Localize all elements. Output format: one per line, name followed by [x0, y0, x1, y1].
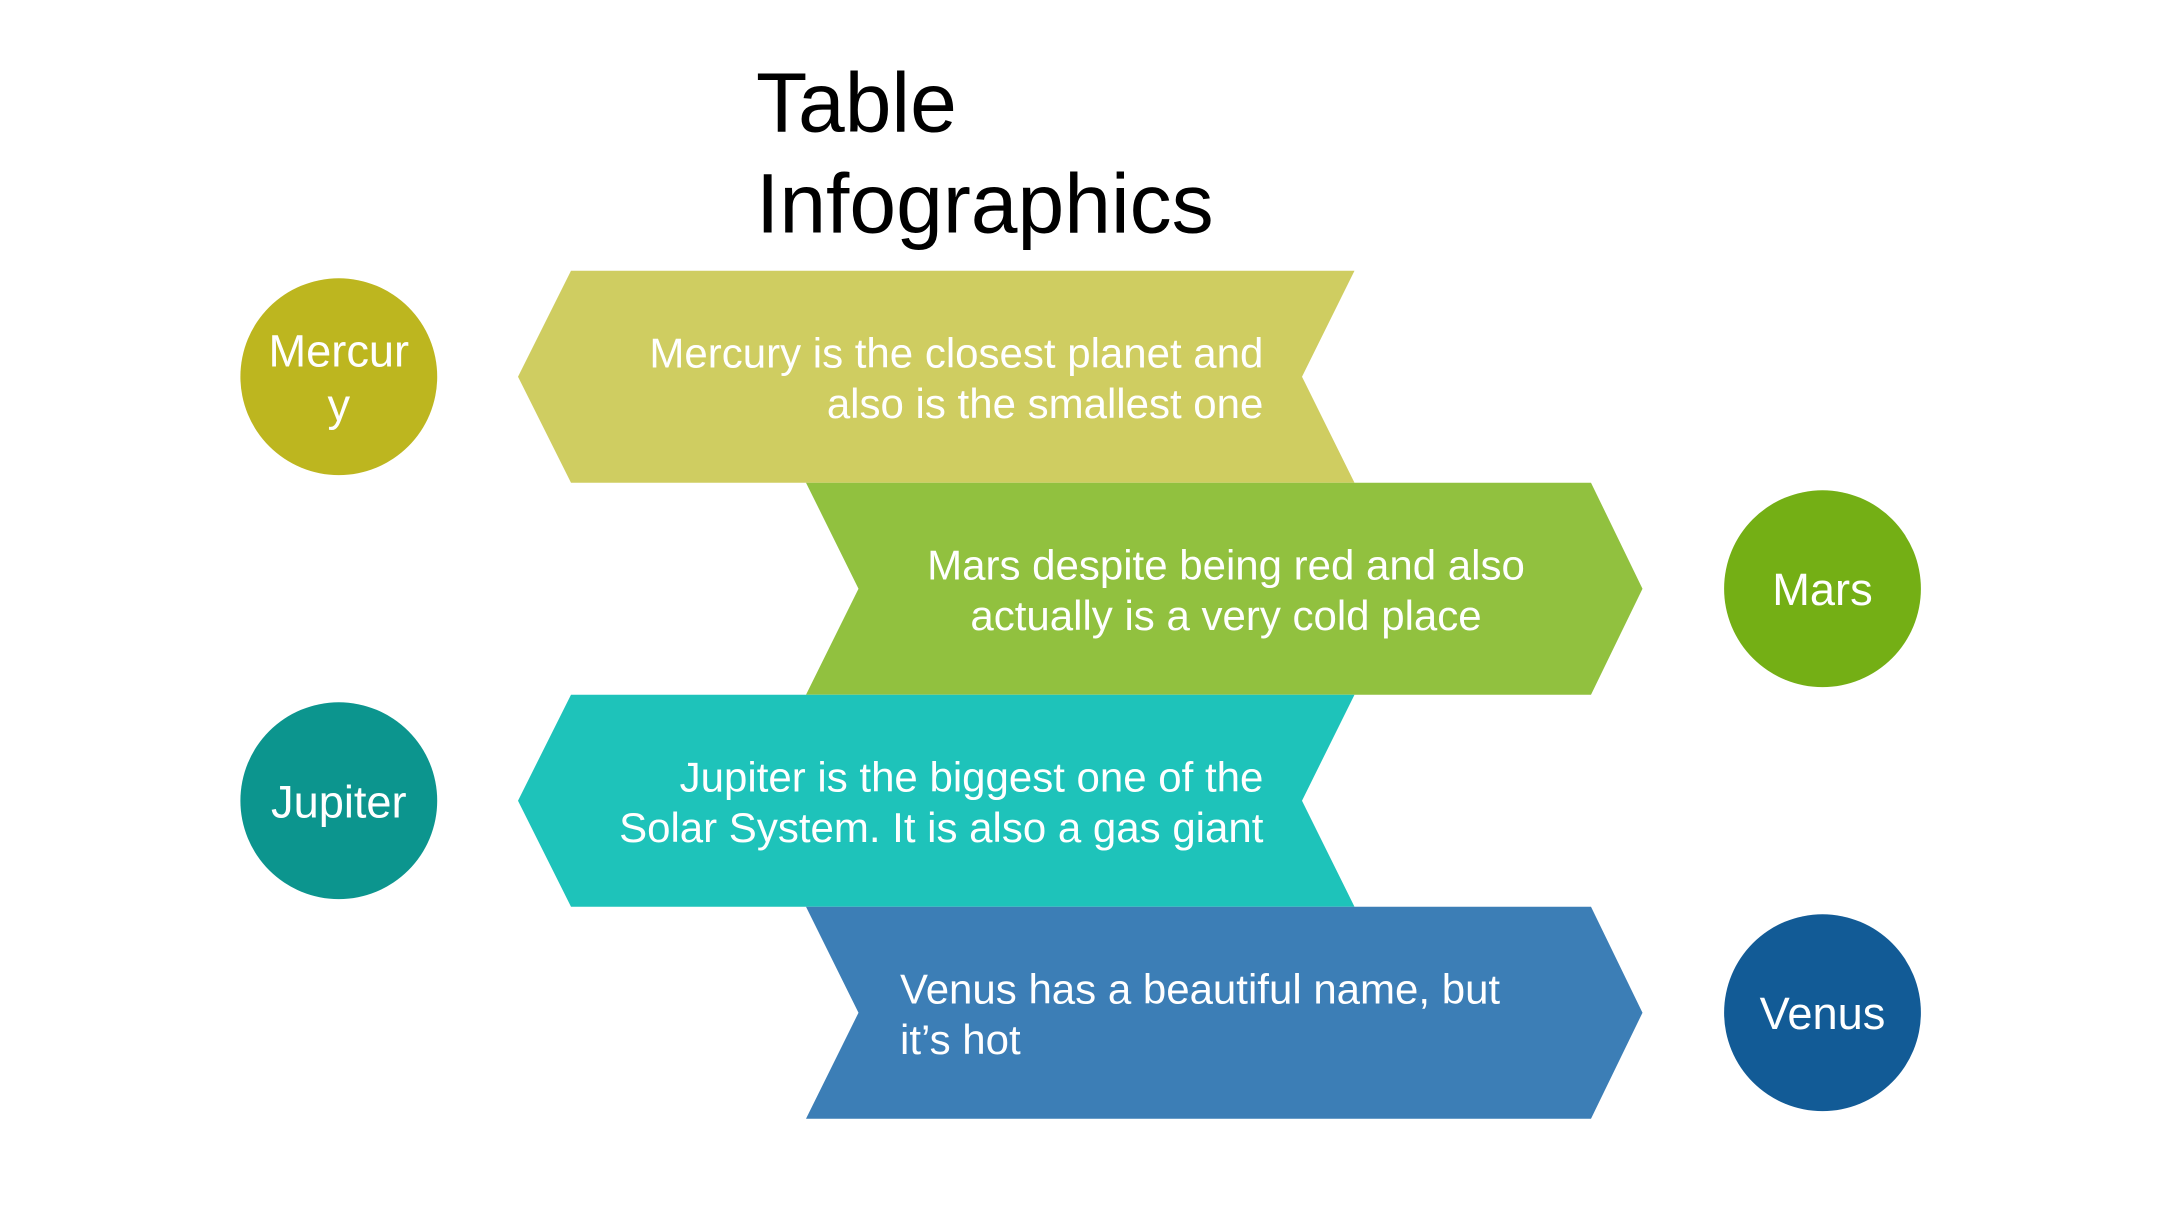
banner: Venus	[806, 907, 1642, 1119]
banner: Mercury	[518, 271, 1354, 483]
circle label: Mercury: Mercur	[269, 326, 409, 377]
circle label: Mercury: y	[328, 380, 351, 430]
circle: Mercury	[240, 278, 437, 475]
title: Infographics	[756, 157, 1214, 251]
row: Jupiter	[240, 695, 1354, 907]
circle label: Mars: Mars	[1772, 564, 1873, 615]
row: Venus	[806, 907, 1921, 1119]
row: Mars	[806, 483, 1921, 695]
circle: Venus	[1724, 914, 1921, 1111]
description: Mercury: Mercury is the closest planet and	[649, 330, 1263, 377]
circle: Jupiter	[240, 702, 437, 899]
description: Mars: actually is a very cold place	[970, 592, 1482, 639]
circle: Mars	[1724, 490, 1921, 687]
description: Mars: Mars despite being red and also	[927, 542, 1525, 589]
description: Venus: Venus has a beautiful name, but	[900, 966, 1500, 1013]
banner: Jupiter	[518, 695, 1354, 907]
description: Venus: it’s hot	[900, 1016, 1021, 1063]
row: Mercury	[240, 271, 1354, 483]
circle label: Venus: Venus	[1760, 988, 1885, 1039]
description: Jupiter: Solar System. It is also a gas giant	[619, 804, 1264, 851]
title: Table	[756, 56, 957, 150]
description: Mercury: also is the smallest one	[827, 380, 1263, 427]
description: Jupiter: Jupiter is the biggest one of the	[680, 754, 1263, 801]
circle label: Jupiter: Jupiter	[271, 776, 407, 828]
banner: Mars	[806, 483, 1642, 695]
